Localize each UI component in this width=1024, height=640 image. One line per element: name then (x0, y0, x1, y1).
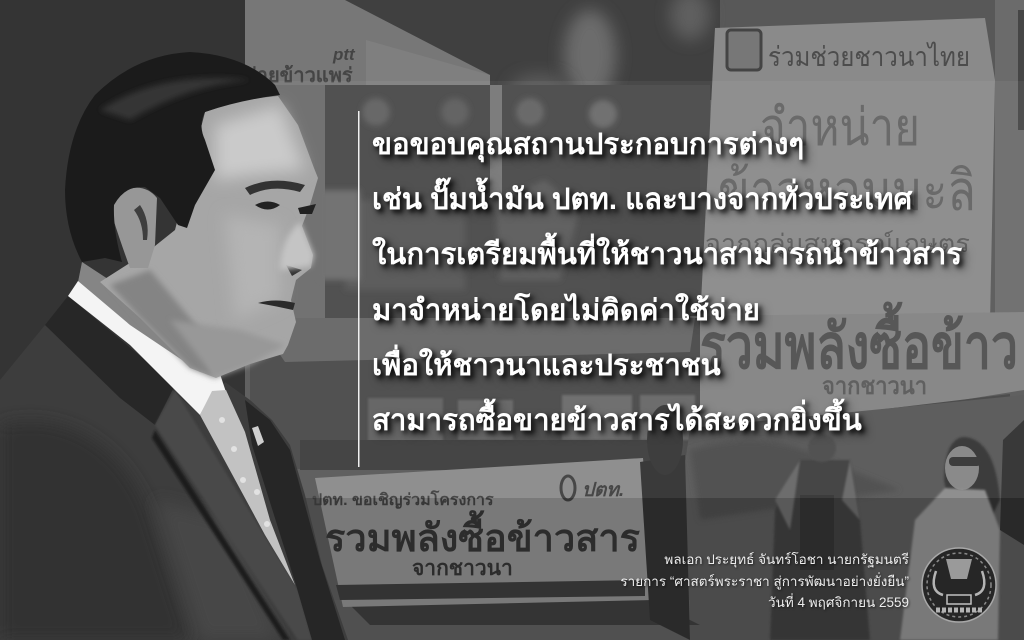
background event photo (245, 0, 1024, 640)
portrait of the prime minister (0, 52, 348, 640)
rice sign top right (700, 0, 1024, 322)
rice sign top right: ร่วมช่วยชาวนาไทย (768, 42, 970, 72)
person in patterned shirt (770, 434, 870, 640)
woman in sunglasses (900, 437, 1000, 640)
road and ground (290, 395, 1024, 640)
main message text: เพื่อให้ชาวนาและประชาชน (372, 349, 721, 382)
main message text: มาจำหน่ายโดยไม่คิดค่าใช้จ่าย (372, 294, 760, 327)
main message text (372, 128, 970, 440)
left dark panel (0, 0, 245, 640)
trees and sky (345, 0, 720, 106)
white tent (245, 0, 490, 85)
person in dark clothes at right edge (1000, 420, 1024, 545)
government seal (922, 548, 996, 622)
credit text: รายการ “ศาสตร์พระราชา สู่การพัฒนาอย่างยั่งยืน” (620, 574, 909, 589)
main message text: ขอขอบคุณสถานประกอบการต่างๆ (372, 128, 804, 161)
credit text: พลเอก ประยุทธ์ จันทร์โอชา นายกรัฐมนตรี (664, 552, 909, 567)
ear (112, 188, 157, 268)
face (100, 96, 318, 378)
PTT banner: ปตท. ขอเชิญร่วมโครงการ (312, 489, 494, 510)
second banner: จากชาวนา (822, 373, 927, 400)
credit text (620, 552, 910, 610)
PTT banner: รวมพลังซื้อข้าวสาร (325, 510, 641, 560)
PTT banner: จากชาวนา (412, 557, 513, 580)
hair (65, 52, 280, 262)
credit text: วันที่ 4 พฤศจิกายน 2559 (768, 595, 909, 610)
main message text: สามารถซื้อขายข้าวสารได้สะดวกยิ่งขึ้น (372, 404, 862, 437)
white tent: ย่ายข้าวแพร่ (245, 64, 353, 87)
white tent: ptt (332, 45, 356, 64)
white shirt collar (68, 281, 226, 415)
suit jacket (0, 296, 348, 640)
stall roof and shelves (250, 318, 700, 470)
vertical divider line (358, 111, 360, 467)
second banner (690, 301, 1024, 435)
lapel pin (252, 426, 264, 446)
rice sign top right: จำหน่าย (760, 99, 920, 157)
translucent bands (245, 81, 1024, 498)
PTT banner (312, 405, 690, 640)
rice sign top right: ข้าวหอมมะลิ (718, 159, 976, 222)
neck (78, 262, 215, 392)
rice sign top right: จากกลุ่มสหกรณ์เกษตร (705, 230, 970, 259)
main message text: ในการเตรียมพื้นที่ให้ชาวนาสามารถนำข้าวสาร (372, 238, 962, 271)
people and posters under tent (245, 85, 710, 325)
spotted tie (200, 390, 295, 585)
PTT banner: ปตท. (582, 480, 624, 501)
main message text: เช่น ปั๊มน้ำมัน ปตท. และบางจากทั่วประเทศ (372, 183, 912, 216)
